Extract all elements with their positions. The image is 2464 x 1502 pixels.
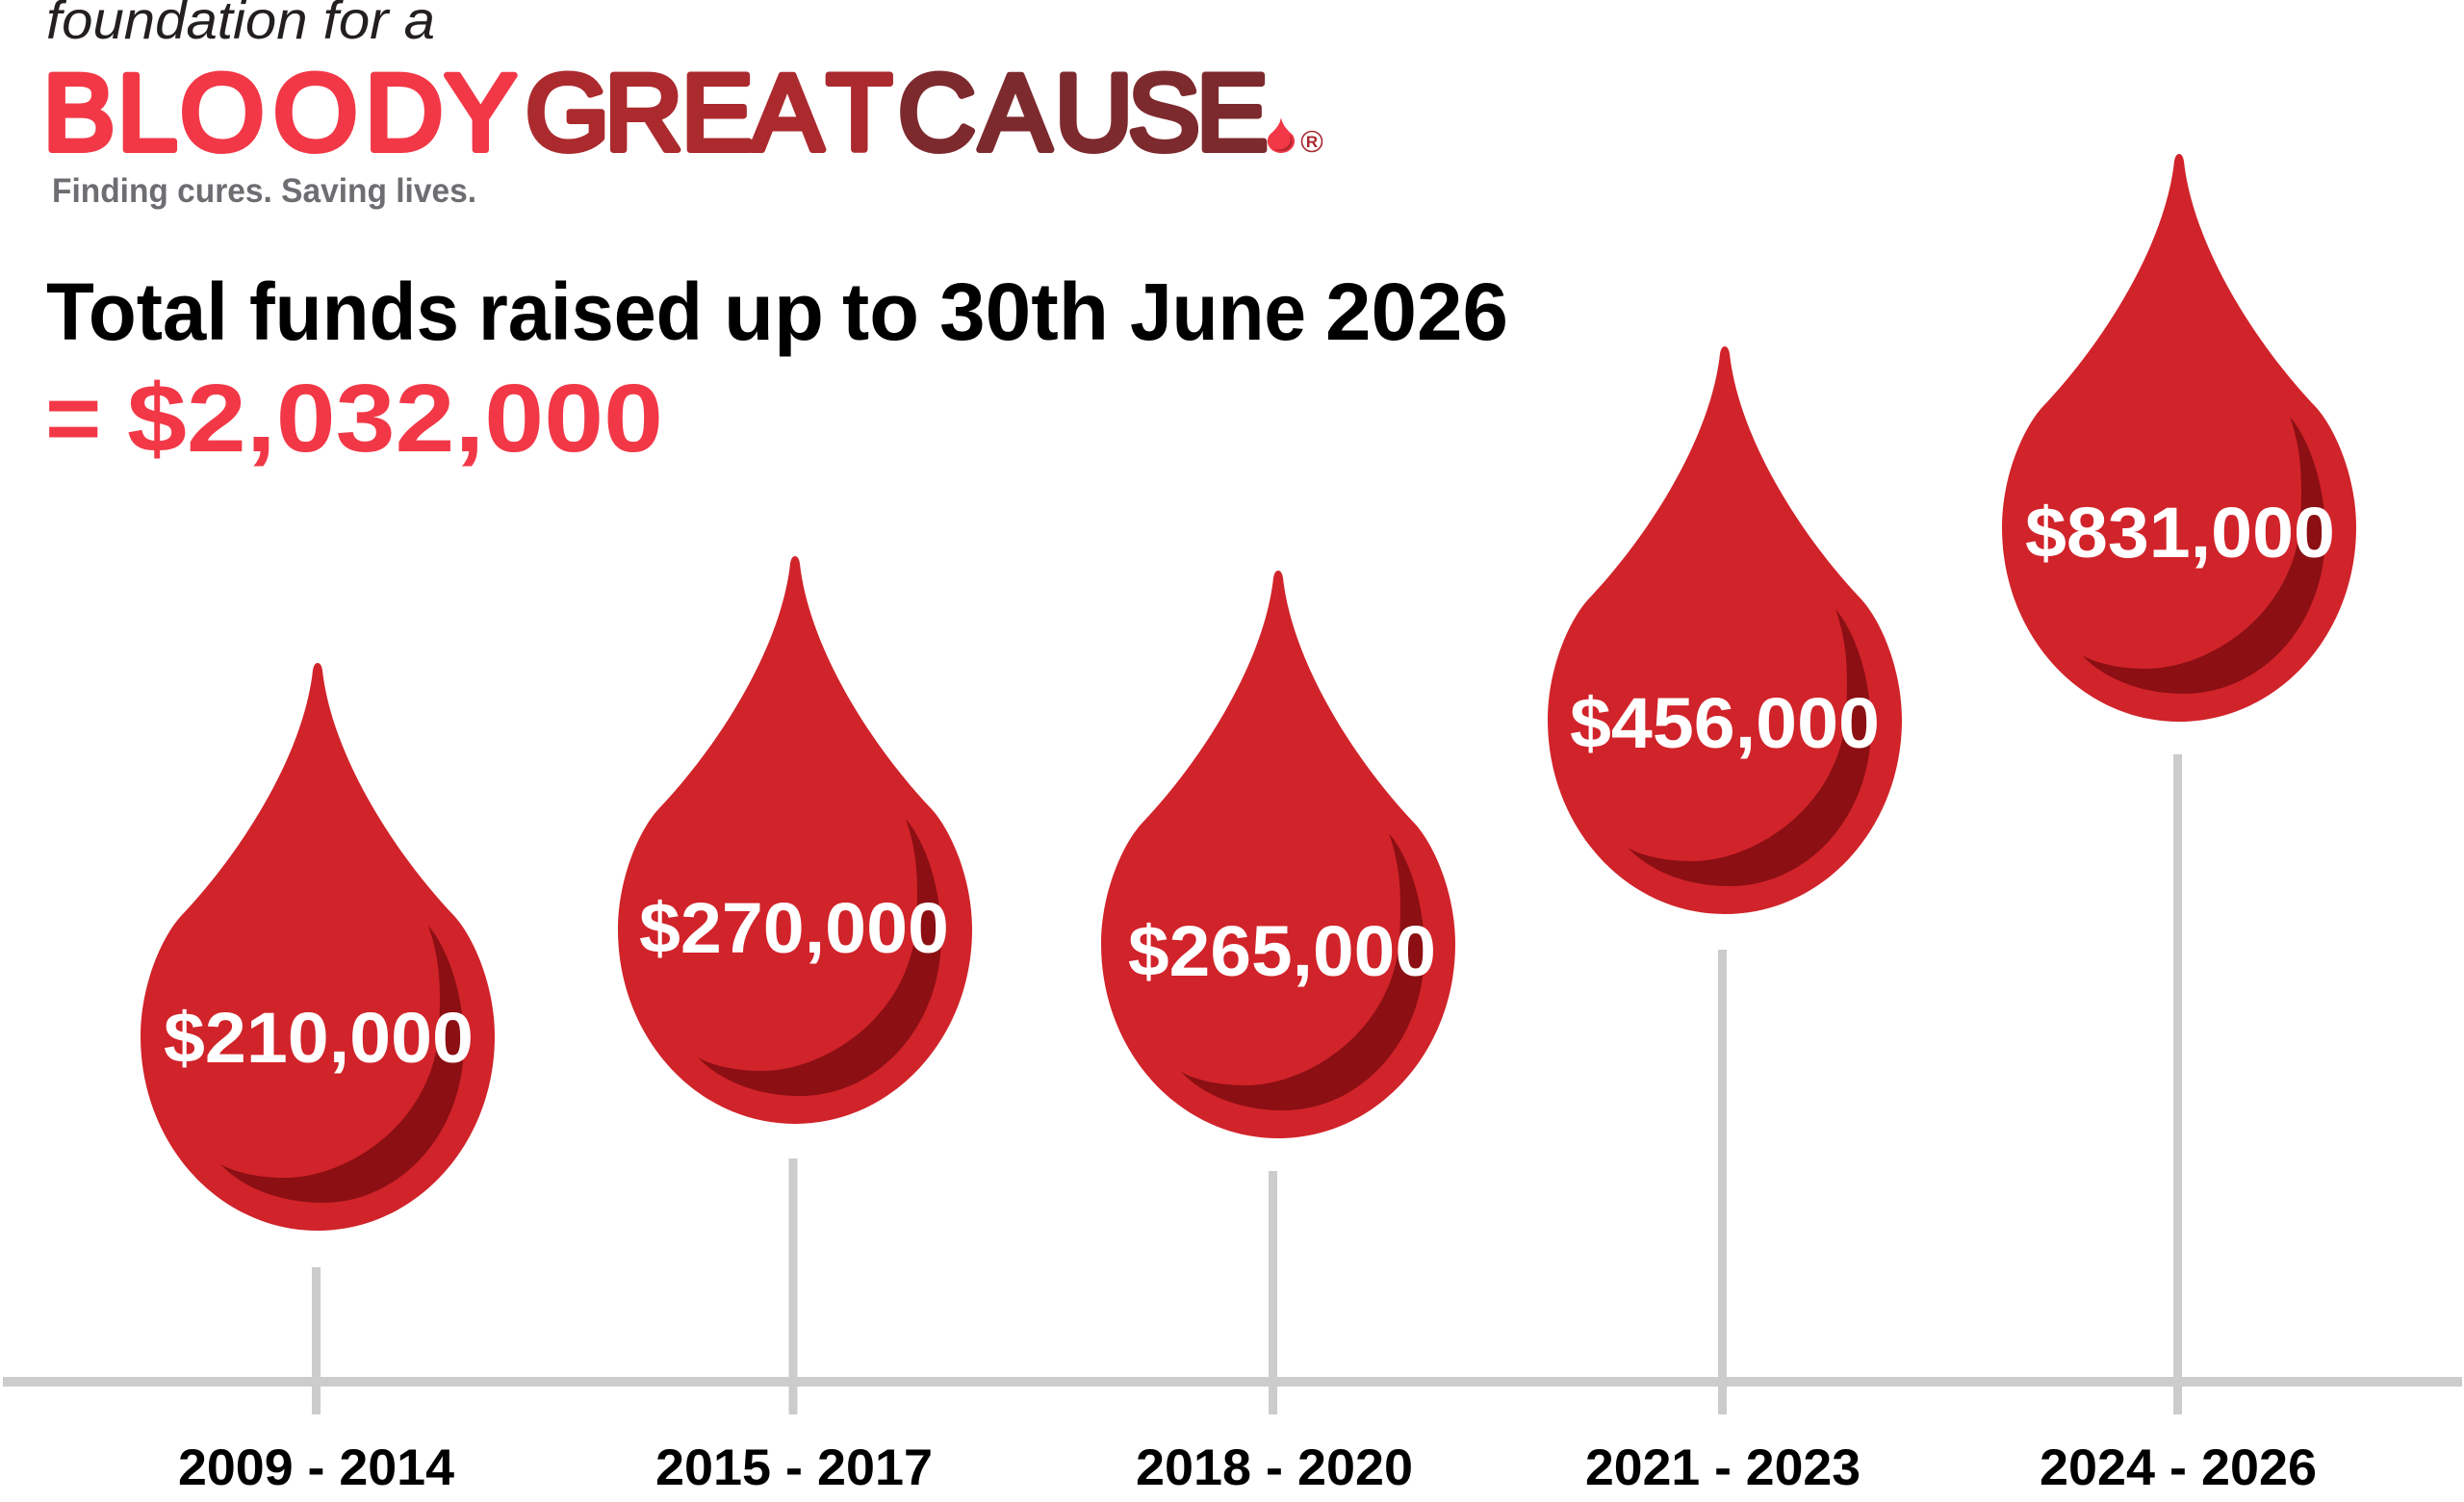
logo tagline: Finding cures. Saving lives.	[52, 172, 476, 210]
drop: 2018 - 2020	[1101, 571, 1455, 1138]
icon: registered mark: R	[1306, 133, 1318, 151]
drop: 2015 - 2017	[618, 556, 972, 1124]
period label: 2015 - 2017	[655, 1439, 933, 1496]
amount: $265,000: $265,000	[1128, 911, 1436, 991]
column: 2009 - 2014	[141, 663, 495, 1496]
total amount: =	[45, 365, 101, 472]
tick	[1718, 950, 1727, 1414]
column: 2021 - 2023	[1548, 346, 1902, 1496]
tick	[789, 1158, 797, 1414]
logo word: CAUSE: CAUSE	[898, 52, 1269, 173]
amount: $831,000: $831,000	[2025, 493, 2335, 573]
period label: 2024 - 2026	[2040, 1439, 2317, 1496]
icon: logo blood drop	[1268, 118, 1295, 153]
amount: $456,000: $456,000	[1570, 683, 1880, 763]
title: funds	[249, 267, 459, 357]
tick	[1269, 1171, 1277, 1414]
column: 2018 - 2020	[1101, 571, 1455, 1496]
title: June	[1130, 267, 1306, 357]
icon: registered mark	[1301, 131, 1322, 152]
title: Total	[46, 267, 228, 357]
drop: 2024 - 2026	[2002, 154, 2356, 722]
tick	[2173, 754, 2182, 1414]
title	[46, 267, 1508, 357]
period label: 2018 - 2020	[1136, 1439, 1413, 1496]
drop: 2021 - 2023	[1548, 346, 1902, 914]
tick	[312, 1267, 321, 1414]
amount: $210,000: $210,000	[164, 998, 474, 1078]
column: 2015 - 2017	[618, 556, 972, 1496]
total amount: $2,032,000	[127, 365, 663, 472]
drop: 2009 - 2014	[141, 663, 495, 1231]
logo: foundation for a Bloody Great Cause	[43, 0, 1322, 210]
column: 2024 - 2026	[2002, 154, 2356, 1496]
logo word: BLOODY: BLOODY	[43, 52, 517, 173]
amount: $270,000: $270,000	[639, 888, 949, 968]
title: 30th	[939, 267, 1109, 357]
title: to	[842, 267, 919, 357]
title: up	[724, 267, 824, 357]
title: 2026	[1325, 267, 1508, 357]
logo word: GREAT: GREAT	[526, 52, 892, 173]
period label: 2009 - 2014	[178, 1439, 455, 1496]
title: raised	[478, 267, 703, 357]
period label: 2021 - 2023	[1585, 1439, 1861, 1496]
timeline axis	[3, 1377, 2462, 1387]
